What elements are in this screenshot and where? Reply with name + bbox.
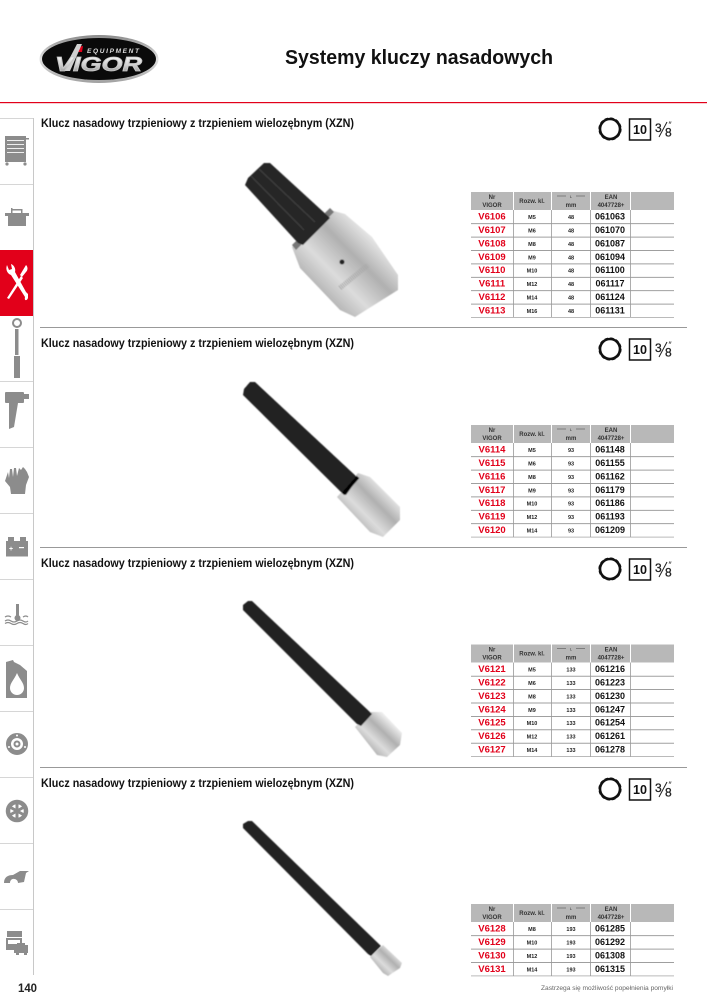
table: section 1: 48 [568, 296, 574, 302]
table: section 2: M10 [527, 502, 537, 508]
icon: battery [6, 537, 28, 556]
header rule [0, 102, 707, 103]
icon: coolant temperature [5, 604, 28, 624]
table header [471, 192, 674, 210]
table: section 3: 133 [566, 748, 576, 754]
icon: oil canister [6, 660, 27, 698]
table: section 4: M12 [527, 954, 537, 960]
table: section 4: 193 [566, 954, 576, 960]
table: section 2: 93 [568, 502, 574, 508]
table: section 1 [471, 192, 674, 318]
table: section 1: M5 [528, 215, 536, 221]
table: section 1: M10 [527, 269, 537, 275]
table: section 4: V6128 [478, 924, 506, 934]
logo: Vigor Equipment [40, 35, 158, 83]
table: section 3: M5 [528, 668, 536, 674]
table: section 1: V6109 [478, 252, 506, 263]
product photo: 93 mm XZN socket [243, 382, 400, 537]
table header: VIGOR [482, 203, 502, 209]
table header [471, 644, 674, 662]
table: section 4: M10 [527, 940, 537, 946]
heading: section 1: Klucz nasadowy trzpieniowy z trzpieniem wielozębnym (XZN) [41, 118, 354, 130]
icon: ratchet handle [13, 319, 21, 378]
table: section 3: 133 [566, 668, 576, 674]
table header: VIGOR [482, 656, 502, 662]
icon: brake disc [8, 734, 26, 752]
table: section 1: V6108 [478, 238, 506, 249]
table: section 1: V6106 [478, 212, 506, 222]
section divider 2 [40, 547, 687, 548]
product photo: short XZN socket [245, 163, 398, 317]
page number: 140 [18, 981, 37, 995]
icon: wheel [8, 802, 26, 820]
table: section 1: M8 [528, 242, 536, 248]
table header: Rozw. kl. [519, 652, 545, 658]
table: section 1: 061070 [595, 225, 625, 235]
table header: 4047728+ [598, 656, 625, 662]
table: section 1: V6107 [478, 225, 506, 236]
table: section 3 [471, 644, 674, 757]
table: section 2: 061186 [595, 498, 625, 508]
table: section 1: 48 [568, 228, 574, 234]
table: section 3: V6124 [478, 704, 506, 715]
table: section 3: 061216 [595, 664, 625, 674]
spec icons: section 2: 10 [633, 342, 647, 357]
table: section 1: 061094 [595, 252, 625, 262]
table: section 3: 133 [566, 681, 576, 687]
table: section 4: M14 [527, 967, 538, 973]
icon: active category, wrench and screwdriver [0, 250, 33, 316]
spec icons: section 2: 8 [665, 346, 672, 360]
table header: EAN [605, 907, 617, 913]
table header: Nr [489, 428, 496, 434]
table header: mm [566, 436, 576, 442]
table: section 2: 93 [568, 488, 574, 494]
table: section 1: 48 [568, 215, 574, 221]
table: section 3: V6122 [478, 678, 506, 688]
table: section 1: 48 [568, 255, 574, 261]
spec icons: section 1: 10 [633, 122, 647, 137]
table: section 4: V6129 [478, 937, 506, 948]
table: section 2: 061193 [595, 512, 625, 522]
icon: battery: + [9, 546, 13, 553]
table header: Rozw. kl. [519, 199, 545, 205]
table: section 1: M16 [527, 309, 537, 315]
table: section 4: 193 [566, 927, 576, 933]
table: section 3: 133 [566, 708, 576, 714]
table: section 4: V6131 [478, 964, 506, 975]
spec icons: section 3 [599, 558, 672, 580]
table: section 3: 061261 [595, 731, 625, 741]
table: section 1: V6112 [479, 292, 505, 303]
table: section 3: 133 [566, 735, 576, 741]
table: section 4: 061308 [595, 950, 625, 960]
table: section 2: 061209 [595, 525, 625, 535]
table: section 2 [471, 425, 674, 538]
table: section 3: 061278 [595, 744, 625, 754]
table header [471, 904, 674, 922]
table: section 1: M9 [528, 255, 536, 261]
heading: section 4: Klucz nasadowy trzpieniowy z trzpieniem wielozębnym (XZN) [41, 778, 354, 790]
table: section 3: V6125 [478, 718, 506, 729]
table header: 4047728+ [598, 915, 625, 921]
table header: Rozw. kl. [519, 432, 545, 438]
table header [471, 425, 674, 443]
table header: L [570, 427, 573, 432]
table: section 3: M9 [528, 708, 536, 714]
table: section 1: M14 [527, 296, 538, 302]
spec icons: section 2: 3 [655, 341, 662, 355]
table: section 2: 93 [568, 448, 574, 454]
spec icons: section 3: 3 [655, 561, 662, 575]
icon: tool cabinet [5, 136, 29, 166]
product photo: 193 mm XZN socket [243, 821, 402, 976]
spec icons: section 3: 8 [665, 566, 672, 580]
table: section 1: 061100 [595, 265, 625, 275]
table: section 1: 48 [568, 242, 574, 248]
table: section 3: 061223 [595, 678, 625, 688]
table header: Nr [489, 195, 496, 201]
table: section 2: V6115 [479, 458, 506, 469]
table header: Nr [489, 907, 496, 913]
table: section 3: 133 [566, 694, 576, 700]
icon: truck and car [6, 931, 28, 955]
table: section 4: 193 [566, 967, 576, 973]
table: section 1: 48 [568, 269, 574, 275]
table header: L [570, 646, 573, 652]
table: section 1: 061117 [595, 279, 625, 289]
table header: mm [566, 203, 576, 209]
table: section 2: M6 [528, 462, 536, 468]
table: section 1: 061124 [595, 292, 625, 302]
table: section 2: M9 [528, 488, 536, 494]
table: section 3: M6 [528, 681, 536, 687]
table: section 3: V6126 [478, 731, 506, 742]
table: section 2: V6114 [479, 444, 506, 456]
footer disclaimer: Zastrzega się możliwość popełnienia pomyłki [541, 985, 673, 992]
table: section 3: M10 [527, 721, 537, 727]
section divider 3 [40, 767, 687, 768]
table: section 2: M12 [527, 515, 537, 521]
table: section 2: 061148 [595, 444, 625, 454]
table header: L [570, 194, 573, 199]
table: section 3: 061254 [595, 718, 625, 728]
product photo: 133 mm XZN socket [243, 601, 402, 757]
table: section 1: M12 [527, 282, 537, 288]
spec icons: section 1 [599, 118, 672, 140]
spec icons: section 4: ″ [668, 780, 672, 790]
table header: EAN [605, 428, 617, 434]
table: section 3: V6123 [478, 691, 506, 702]
table: section 3: V6127 [478, 744, 506, 756]
table: section 4: 061315 [595, 964, 625, 974]
table header: VIGOR [482, 915, 502, 921]
table: section 4: V6130 [478, 950, 506, 961]
table: section 4: 193 [566, 940, 576, 946]
table: section 3: 061230 [595, 691, 625, 701]
table header: EAN [605, 195, 617, 201]
sidebar: category navigation [0, 118, 34, 975]
spec icons: section 1: 8 [665, 126, 672, 140]
icon: car body [4, 871, 29, 883]
table: section 2: M8 [528, 475, 536, 481]
table: section 2: M14 [527, 528, 538, 534]
table: section 2: V6120 [478, 525, 506, 536]
table header: 4047728+ [598, 203, 625, 209]
table header: EAN [605, 648, 617, 654]
spec icons: section 1: ″ [668, 120, 672, 130]
table: section 3: M12 [527, 735, 537, 741]
table: section 1: 48 [568, 309, 574, 315]
table: section 2: 93 [568, 475, 574, 481]
spec icons: section 1: 3 [655, 121, 662, 135]
table: section 1: 061087 [595, 238, 625, 248]
section divider 1 [40, 327, 687, 328]
table: section 2: V6117 [479, 485, 505, 496]
table: section 2: 061179 [595, 485, 625, 495]
spec icons: section 4 [599, 778, 672, 800]
table: section 3: M8 [528, 694, 536, 700]
logo: Vigor Equipment: EQUIPMENT [87, 48, 140, 55]
heading: section 3: Klucz nasadowy trzpieniowy z trzpieniem wielozębnym (XZN) [41, 558, 354, 570]
table: section 1: M6 [528, 228, 536, 234]
table header: mm [566, 656, 576, 662]
spec icons: section 4: 3 [655, 781, 662, 795]
table: section 3: 061247 [595, 704, 625, 714]
table: section 1: 48 [568, 282, 574, 288]
table: section 2: 93 [568, 515, 574, 521]
spec icons: section 4: 10 [633, 782, 647, 797]
table: section 2: 061155 [595, 458, 625, 468]
table: section 4: 061292 [595, 937, 625, 947]
icon: tool box [5, 208, 29, 226]
table header: L [570, 906, 573, 911]
table: section 3: V6121 [478, 664, 506, 675]
icon: gloves [5, 467, 29, 494]
table: section 3: 133 [566, 721, 576, 727]
icon: impact wrench [5, 392, 29, 429]
table header: 4047728+ [598, 436, 625, 442]
table: section 2: V6116 [479, 471, 505, 482]
table header: Rozw. kl. [519, 911, 545, 917]
table header: VIGOR [482, 436, 502, 442]
spec icons: section 3: 10 [633, 562, 647, 577]
table: section 1: V6111 [479, 279, 506, 290]
table: section 1: V6110 [479, 265, 505, 276]
table: section 2: M5 [528, 448, 536, 454]
table: section 4 [471, 904, 674, 976]
table: section 4: M8 [528, 927, 536, 933]
table: section 1: V6113 [479, 305, 505, 316]
spec icons: section 4: 8 [665, 786, 672, 800]
spec icons: section 2 [599, 338, 672, 360]
table: section 2: 061162 [595, 471, 625, 481]
table: section 2: 93 [568, 462, 574, 468]
spec icons: section 3: ″ [668, 560, 672, 570]
table: section 3: M14 [527, 748, 538, 754]
table: section 2: V6118 [479, 498, 505, 509]
heading: section 2: Klucz nasadowy trzpieniowy z trzpieniem wielozębnym (XZN) [41, 338, 354, 350]
table: section 1: 061131 [595, 305, 625, 315]
table header: mm [566, 915, 576, 921]
table: section 2: 93 [568, 528, 574, 534]
page title: Systemy kluczy nasadowych [285, 46, 553, 69]
logo: Vigor Equipment: VIGOR [55, 54, 143, 76]
spec icons: section 2: ″ [668, 340, 672, 350]
table header: Nr [489, 648, 496, 654]
table: section 1: 061063 [595, 212, 625, 222]
table: section 4: 061285 [595, 924, 625, 934]
table: section 2: V6119 [479, 512, 505, 523]
